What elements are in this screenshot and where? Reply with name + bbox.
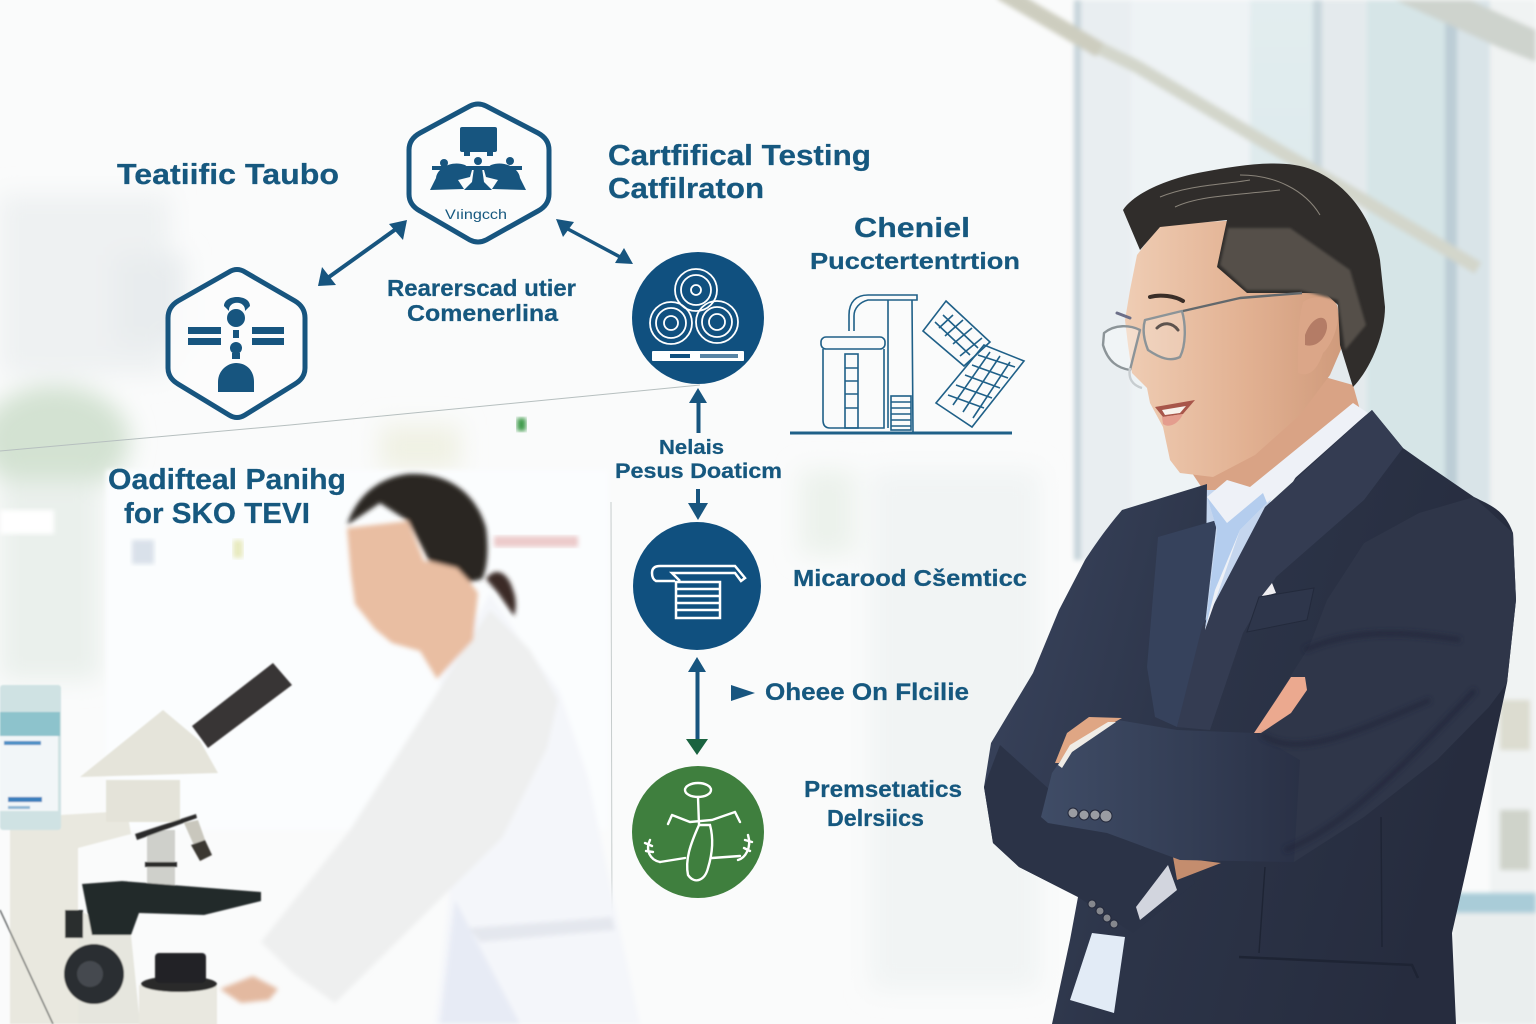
heading: Cheniel Pucctertentrtion: Pucctertentrtion — [810, 248, 1020, 274]
node: tray circle — [633, 522, 761, 650]
man left hand — [1055, 717, 1122, 763]
heading: Cartfifical Testing Catfilraton — [608, 140, 871, 205]
man face — [1125, 220, 1345, 477]
man right hand fingers — [1254, 677, 1307, 733]
hexagon top caption: Vıingcch — [445, 206, 507, 222]
man lower hand — [1173, 857, 1221, 880]
scientist coat body — [435, 593, 640, 1024]
icon: small right pointer — [731, 685, 755, 701]
heading: Cheniel Pucctertentrtion — [810, 212, 1020, 274]
node: green plant circle — [632, 766, 764, 898]
label: Oheee On Flcilie: Oheee On Flcilie — [765, 679, 969, 706]
heading: Oadifteal Panihg for SKO TEVI: for SKO TEVI — [124, 498, 310, 530]
arrow: hexagon to coil circle — [556, 219, 633, 264]
hexagon left icon — [188, 297, 284, 392]
hexagon top icon — [430, 127, 526, 190]
thin glass reflection lines — [0, 385, 700, 930]
arrow: between hexagons — [318, 220, 407, 286]
label: Premsetiatics Delrsiics: Delrsiics — [827, 805, 924, 831]
photo: microscope — [0, 663, 292, 1024]
man shirt — [1205, 490, 1276, 630]
photo: executive man in suit — [984, 164, 1516, 1024]
label: Nelais Pesus Doaticm: Nelais — [659, 437, 724, 459]
heading: Cartfifical Testing Catfilraton: Catfilraton — [608, 173, 764, 205]
man hair — [1123, 164, 1385, 387]
man lower sleeve buttons — [1088, 900, 1118, 928]
man forearm crossing — [1041, 720, 1300, 862]
scientist neck and face — [347, 521, 478, 679]
photo: scientist in white coat — [220, 474, 640, 1024]
heading: Teatiific Taubo: Teatiific Taubo — [117, 159, 339, 191]
man upper sleeve — [1254, 497, 1516, 862]
man jacket left lapel — [1147, 520, 1217, 727]
window panes and frames — [1001, 0, 1536, 1024]
heading: Cheniel Pucctertentrtion: Cheniel — [854, 212, 970, 243]
man glasses — [1103, 293, 1302, 388]
man suit folds and seams — [1262, 633, 1475, 850]
man pocket square — [1261, 583, 1276, 597]
arrow: up to coil circle — [689, 388, 707, 433]
node: hexagon left — [168, 270, 305, 418]
scientist hair — [347, 474, 487, 582]
man sleeve buttons — [1068, 808, 1112, 822]
scientist hand — [220, 976, 278, 1003]
heading: Cartfifical Testing Catfilraton: Cartfifical Testing — [608, 140, 871, 172]
label: Premsetiatics Delrsiics — [804, 776, 962, 831]
man shirt tail — [1070, 933, 1125, 1013]
label: Rearerscad utier Comenerlina: Rearerscad utier — [387, 275, 576, 301]
man smile — [1155, 400, 1195, 417]
man breast pocket — [1247, 588, 1314, 632]
man lower sleeve — [984, 745, 1195, 933]
label: Nelais Pesus Doaticm: Pesus Doaticm — [615, 460, 782, 483]
label: Rearerscad utier Comenerlina — [387, 275, 576, 326]
man neck — [1190, 370, 1360, 500]
node: hexagon top — [409, 104, 549, 242]
scientist sleeve — [261, 610, 558, 1003]
man lower cuff — [1136, 865, 1177, 920]
man suit jacket — [984, 410, 1516, 1024]
arrow: down to tray circle — [688, 489, 708, 520]
label: Nelais Pesus Doaticm — [615, 437, 782, 483]
heading: Oadifteal Panihg for SKO TEVI — [108, 464, 346, 530]
label: Rearerscad utier Comenerlina: Comenerlina — [407, 300, 558, 326]
icon: lab jar and grids line art — [790, 295, 1024, 433]
photo: reagent bottle — [0, 685, 61, 830]
arrow: double vertical to green circle — [686, 657, 708, 755]
man jacket right lapel — [1177, 410, 1403, 730]
man ear — [1298, 297, 1338, 374]
heading: Oadifteal Panihg for SKO TEVI: Oadifteal Panihg — [108, 464, 346, 496]
man collar — [1205, 403, 1368, 630]
node: coil circle — [632, 252, 764, 384]
label: Micarood Csemticc: Micarood Cšemticc — [793, 565, 1027, 591]
man eyebrow and eye — [1117, 296, 1183, 330]
label: Premsetiatics Delrsiics: Premsetıatics — [804, 776, 962, 802]
